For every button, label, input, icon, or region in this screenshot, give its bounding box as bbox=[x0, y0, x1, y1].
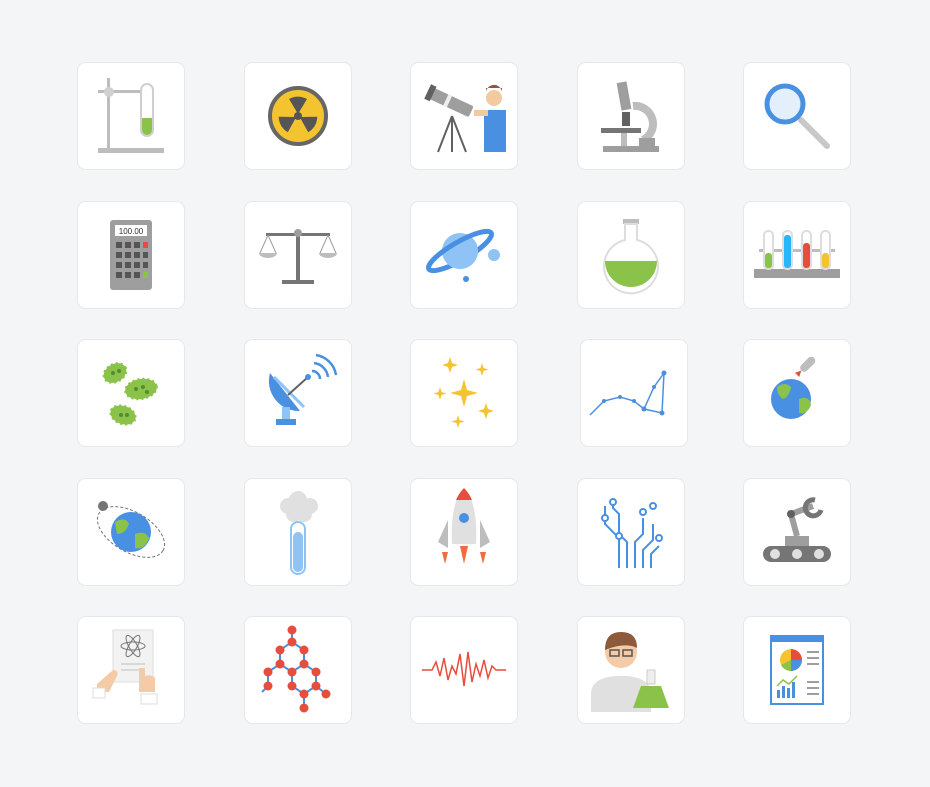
icon card: orbit earth bbox=[78, 478, 184, 586]
icon card: radiation bbox=[244, 62, 352, 170]
icon card: flask bbox=[578, 202, 684, 308]
icon card: circuit bbox=[578, 478, 684, 586]
icon card: lab stand bbox=[78, 62, 184, 170]
icon card: heartbeat bbox=[410, 616, 518, 724]
icon card: constellation bbox=[580, 340, 688, 446]
icon card: earth with rocket bbox=[744, 340, 850, 446]
icon card: test tube rack bbox=[744, 202, 850, 308]
icon card: magnifier bbox=[744, 62, 850, 170]
icon card: bacteria bbox=[78, 340, 184, 446]
icon card: satellite dish bbox=[244, 340, 352, 446]
icon card: paper with atom bbox=[78, 616, 184, 724]
icon card: scale bbox=[244, 202, 352, 308]
icon card: dashboard bbox=[744, 616, 850, 724]
icon card: robot bbox=[744, 478, 850, 586]
icon card: test tube smoke bbox=[244, 478, 352, 586]
icon card: telescope bbox=[410, 62, 518, 170]
icon card: scientist bbox=[578, 616, 684, 724]
icon card: calculator: 100.00 bbox=[119, 227, 144, 236]
icon card: calculator bbox=[78, 202, 184, 308]
icon card: planet bbox=[410, 202, 518, 308]
icon card: sparkles bbox=[410, 340, 518, 446]
icon card: microscope bbox=[578, 62, 684, 170]
icon card: rocket bbox=[410, 478, 518, 586]
icon card: molecule bbox=[244, 616, 352, 724]
